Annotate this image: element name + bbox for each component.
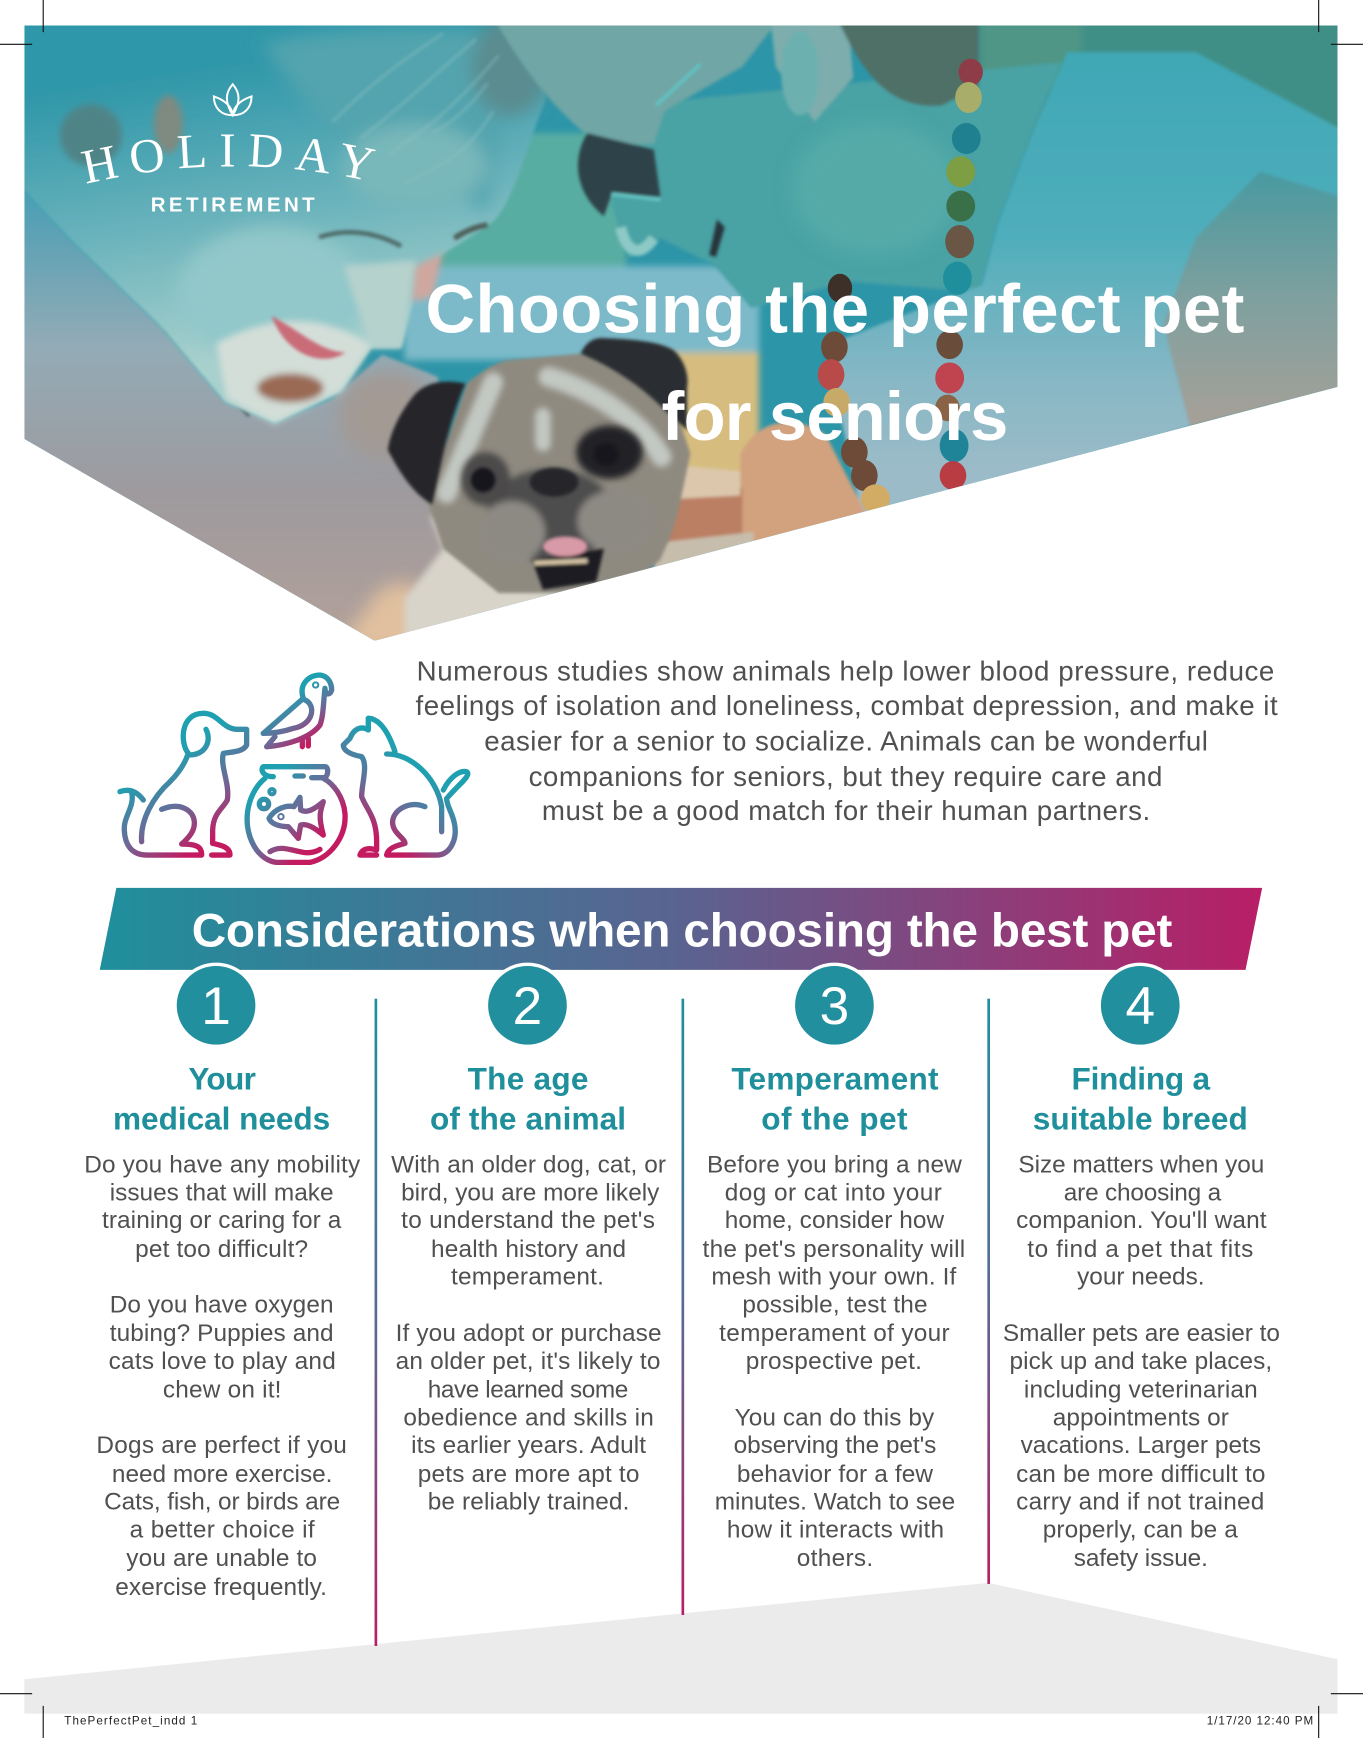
print slug: file name: ThePerfectPet_indd 1 bbox=[64, 1715, 197, 1728]
body text: medical needs: you are unable to bbox=[126, 1545, 317, 1572]
body text: suitable breed: can be more difficult to bbox=[1016, 1461, 1265, 1488]
number badge 2: 2 bbox=[513, 977, 542, 1036]
body text: medical needs: need more exercise. bbox=[112, 1461, 332, 1488]
body text: age of the animal bbox=[391, 1152, 666, 1516]
body text: medical needs: Cats, fish, or birds are bbox=[104, 1489, 340, 1516]
body text: medical needs: Dogs are perfect if you bbox=[96, 1432, 347, 1459]
body text: temperament: prospective pet. bbox=[746, 1348, 922, 1375]
number badge 2 bbox=[486, 964, 568, 1046]
body text: suitable breed: Size matters when you bbox=[1018, 1152, 1264, 1179]
shirt and arms bbox=[654, 52, 1346, 587]
body text: suitable breed: safety issue. bbox=[1074, 1545, 1208, 1572]
heading: temperament of the pet: Temperament bbox=[731, 1061, 939, 1097]
panel: the age of the animal bbox=[391, 964, 666, 1516]
body text: temperament: the pet's personality will bbox=[703, 1236, 965, 1263]
body text: age of the animal: pets are more apt to bbox=[418, 1461, 639, 1488]
intro paragraph: companions for seniors, but they require care and bbox=[529, 761, 1162, 792]
panel: finding a suitable breed bbox=[1003, 964, 1280, 1572]
body text: age of the animal: to understand the pet's bbox=[401, 1207, 655, 1234]
body text: suitable breed: vacations. Larger pets bbox=[1021, 1432, 1261, 1459]
icon: dog, parrot, fishbowl and cat bbox=[120, 675, 468, 862]
body text: suitable breed: appointments or bbox=[1053, 1404, 1229, 1431]
column divider 1 bbox=[375, 999, 377, 1646]
heading: the age of the animal bbox=[430, 1061, 626, 1136]
hero title: for seniors bbox=[662, 378, 1008, 455]
number badge 3 bbox=[793, 964, 875, 1046]
number badge 4 bbox=[1099, 964, 1181, 1046]
body text: age of the animal: temperament. bbox=[451, 1264, 604, 1291]
necklace beads bbox=[818, 59, 983, 513]
banner: considerations heading: Considerations when choosing the best pet bbox=[192, 905, 1173, 958]
logo lotus icon bbox=[214, 84, 252, 115]
logo: Holiday Retirement: HOLIDAY bbox=[80, 134, 376, 184]
heading: finding a suitable breed bbox=[1033, 1061, 1248, 1136]
footer grey band bbox=[24, 1583, 1338, 1714]
hero title: Choosing the perfect pet bbox=[426, 271, 1245, 348]
body text: age of the animal: If you adopt or purchase bbox=[396, 1320, 662, 1347]
body text: temperament: Before you bring a new bbox=[707, 1152, 962, 1179]
logo: Holiday Retirement bbox=[80, 82, 376, 212]
hero photo: couple with pug bbox=[24, 26, 1338, 641]
hero title bbox=[426, 271, 1245, 455]
body text: temperament bbox=[703, 1152, 965, 1572]
body text: medical needs: issues that will make bbox=[110, 1179, 334, 1206]
body text: temperament: possible, test the bbox=[742, 1291, 928, 1318]
body text: temperament: mesh with your own. If bbox=[711, 1264, 957, 1291]
body text: medical needs: pet too difficult? bbox=[135, 1236, 308, 1263]
photo background bbox=[404, 17, 1352, 497]
body text: suitable breed: pick up and take places, bbox=[1010, 1348, 1272, 1375]
body text: temperament: You can do this by bbox=[735, 1404, 935, 1431]
print slug: date and time: 1/17/20 12:40 PM bbox=[1207, 1715, 1313, 1728]
woman bbox=[493, 17, 1062, 308]
panel: your medical needs bbox=[84, 964, 361, 1601]
heading: your medical needs: medical needs bbox=[113, 1100, 330, 1136]
body text: temperament: dog or cat into your bbox=[725, 1179, 942, 1206]
icon: parrot bbox=[263, 675, 332, 747]
logo: Holiday Retirement: RETIREMENT bbox=[151, 194, 315, 217]
heading: finding a suitable breed: Finding a bbox=[1072, 1061, 1211, 1097]
heading: the age of the animal: of the animal bbox=[430, 1100, 626, 1136]
body text: age of the animal: have learned some bbox=[428, 1377, 628, 1404]
intro paragraph: easier for a senior to socialize. Animals can be wonderful bbox=[484, 725, 1208, 756]
body text: temperament: temperament of your bbox=[719, 1320, 950, 1347]
intro paragraph bbox=[416, 656, 1278, 826]
body text: age of the animal: its earlier years. Adult bbox=[411, 1432, 646, 1459]
body text: age of the animal: With an older dog, cat, or bbox=[391, 1152, 666, 1179]
body text: age of the animal: health history and bbox=[431, 1236, 626, 1263]
body text: medical needs: a better choice if bbox=[130, 1516, 315, 1543]
body text: medical needs: training or caring for a bbox=[102, 1207, 342, 1234]
body text: suitable breed: Smaller pets are easier to bbox=[1003, 1320, 1280, 1347]
heading: your medical needs: Your bbox=[188, 1061, 256, 1097]
body text: suitable breed: properly, can be a bbox=[1043, 1516, 1238, 1543]
body text: temperament: observing the pet's bbox=[734, 1432, 936, 1459]
body text: age of the animal: obedience and skills in bbox=[403, 1404, 654, 1431]
heading: finding a suitable breed: suitable breed bbox=[1033, 1100, 1248, 1136]
body text: age of the animal: an older pet, it's likely to bbox=[396, 1348, 660, 1375]
body text: medical needs: chew on it! bbox=[163, 1377, 281, 1404]
body text: medical needs: Do you have oxygen bbox=[110, 1291, 334, 1318]
number badge 3: 3 bbox=[820, 977, 849, 1036]
body text: age of the animal: be reliably trained. bbox=[428, 1489, 629, 1516]
body text: suitable breed: carry and if not trained bbox=[1016, 1489, 1264, 1516]
intro paragraph: must be a good match for their human partners. bbox=[542, 795, 1150, 826]
number badge 4: 4 bbox=[1125, 977, 1155, 1036]
man face and hair bbox=[17, 17, 549, 423]
icon: fishbowl bbox=[247, 767, 345, 862]
body text: temperament: how it interacts with bbox=[727, 1516, 944, 1543]
body text: medical needs bbox=[84, 1152, 361, 1601]
body text: medical needs: cats love to play and bbox=[109, 1348, 336, 1375]
sweater bbox=[17, 183, 476, 654]
intro paragraph: Numerous studies show animals help lower blood pressure, reduce bbox=[417, 656, 1274, 687]
body text: suitable breed bbox=[1003, 1152, 1280, 1572]
body text: medical needs: exercise frequently. bbox=[115, 1574, 327, 1601]
heading: temperament of the pet bbox=[731, 1061, 939, 1136]
body text: age of the animal: bird, you are more likely bbox=[401, 1179, 660, 1206]
heading: your medical needs bbox=[113, 1061, 330, 1136]
heading: temperament of the pet: of the pet bbox=[761, 1100, 908, 1136]
heading: the age of the animal: The age bbox=[468, 1061, 588, 1097]
column divider 2 bbox=[682, 999, 684, 1615]
panel: temperament of the pet bbox=[703, 964, 965, 1572]
body text: suitable breed: are choosing a bbox=[1064, 1179, 1222, 1206]
body text: suitable breed: including veterinarian bbox=[1024, 1377, 1258, 1404]
pug bbox=[388, 338, 690, 654]
banner: considerations heading bbox=[100, 888, 1262, 970]
body text: temperament: others. bbox=[797, 1545, 873, 1572]
column divider 3 bbox=[987, 999, 990, 1584]
intro paragraph: feelings of isolation and loneliness, combat depression, and make it bbox=[416, 690, 1278, 721]
body text: suitable breed: companion. You'll want bbox=[1016, 1207, 1267, 1234]
body text: suitable breed: your needs. bbox=[1077, 1264, 1205, 1291]
icon: cat bbox=[343, 718, 468, 855]
body text: medical needs: Do you have any mobility bbox=[84, 1152, 361, 1179]
body text: temperament: minutes. Watch to see bbox=[715, 1489, 955, 1516]
number badge 1: 1 bbox=[201, 977, 231, 1036]
body text: temperament: home, consider how bbox=[725, 1207, 945, 1234]
number badge 1 bbox=[175, 964, 257, 1046]
icon: dog bbox=[120, 713, 247, 855]
body text: suitable breed: to find a pet that fits bbox=[1027, 1236, 1253, 1263]
body text: temperament: behavior for a few bbox=[737, 1461, 933, 1488]
body text: medical needs: tubing? Puppies and bbox=[110, 1320, 334, 1347]
